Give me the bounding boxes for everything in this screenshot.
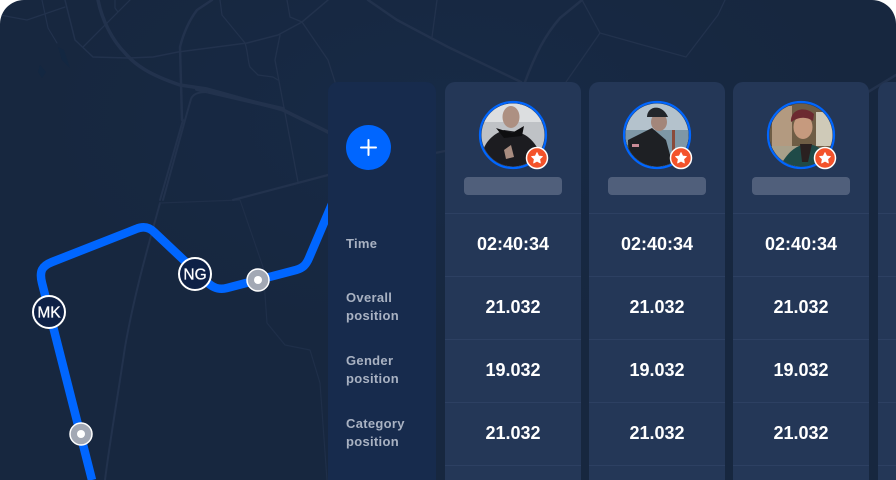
name placeholder xyxy=(752,177,850,195)
label: Gender position: Gender xyxy=(346,353,393,368)
map marker: MK xyxy=(32,295,66,329)
name placeholder xyxy=(464,177,562,195)
label: Overall position xyxy=(346,290,399,323)
map marker: NG: NG xyxy=(183,266,207,284)
panel: athlete 2 xyxy=(589,82,725,480)
label: Gender position: position xyxy=(346,371,399,386)
badge: star xyxy=(814,146,836,170)
name placeholder xyxy=(608,177,706,195)
badge: star xyxy=(526,146,548,170)
value: category: 21.032 xyxy=(485,423,541,443)
label: Overall position: position xyxy=(346,308,399,323)
label: Category position: Category xyxy=(346,416,405,431)
avatar: athlete 2 xyxy=(622,100,692,170)
value: gender: 19.032 xyxy=(485,360,541,380)
label: Category position xyxy=(346,416,405,449)
panel: athlete 3 xyxy=(733,82,869,480)
panel: row labels xyxy=(328,82,436,480)
map marker: NG xyxy=(178,257,212,291)
value: time: 02:40:34 xyxy=(621,234,693,254)
value: category: 21.032 xyxy=(773,423,829,443)
label: Time: Time xyxy=(346,236,377,251)
value: gender: 19.032 xyxy=(629,360,685,380)
badge: star xyxy=(670,146,692,170)
value: category: 21.032 xyxy=(629,423,685,443)
value: overall: 21.032 xyxy=(773,297,829,317)
add button xyxy=(346,125,391,170)
map waypoint lower xyxy=(69,422,93,446)
panel: athlete 1 xyxy=(445,82,581,480)
avatar: athlete 3 xyxy=(766,100,836,170)
value: overall: 21.032 xyxy=(485,297,541,317)
avatar: athlete 1 xyxy=(478,100,548,170)
map waypoint upper xyxy=(246,268,270,292)
value: overall: 21.032 xyxy=(629,297,685,317)
value: time: 02:40:34 xyxy=(765,234,837,254)
map marker: MK: MK xyxy=(37,304,61,322)
label: Gender position xyxy=(346,353,399,386)
panel: athlete 4 cropped xyxy=(878,82,896,480)
value: gender: 19.032 xyxy=(773,360,829,380)
label: Overall position: Overall xyxy=(346,290,392,305)
route line xyxy=(41,204,332,480)
label: Category position: position xyxy=(346,434,399,449)
value: time: 02:40:34 xyxy=(477,234,549,254)
